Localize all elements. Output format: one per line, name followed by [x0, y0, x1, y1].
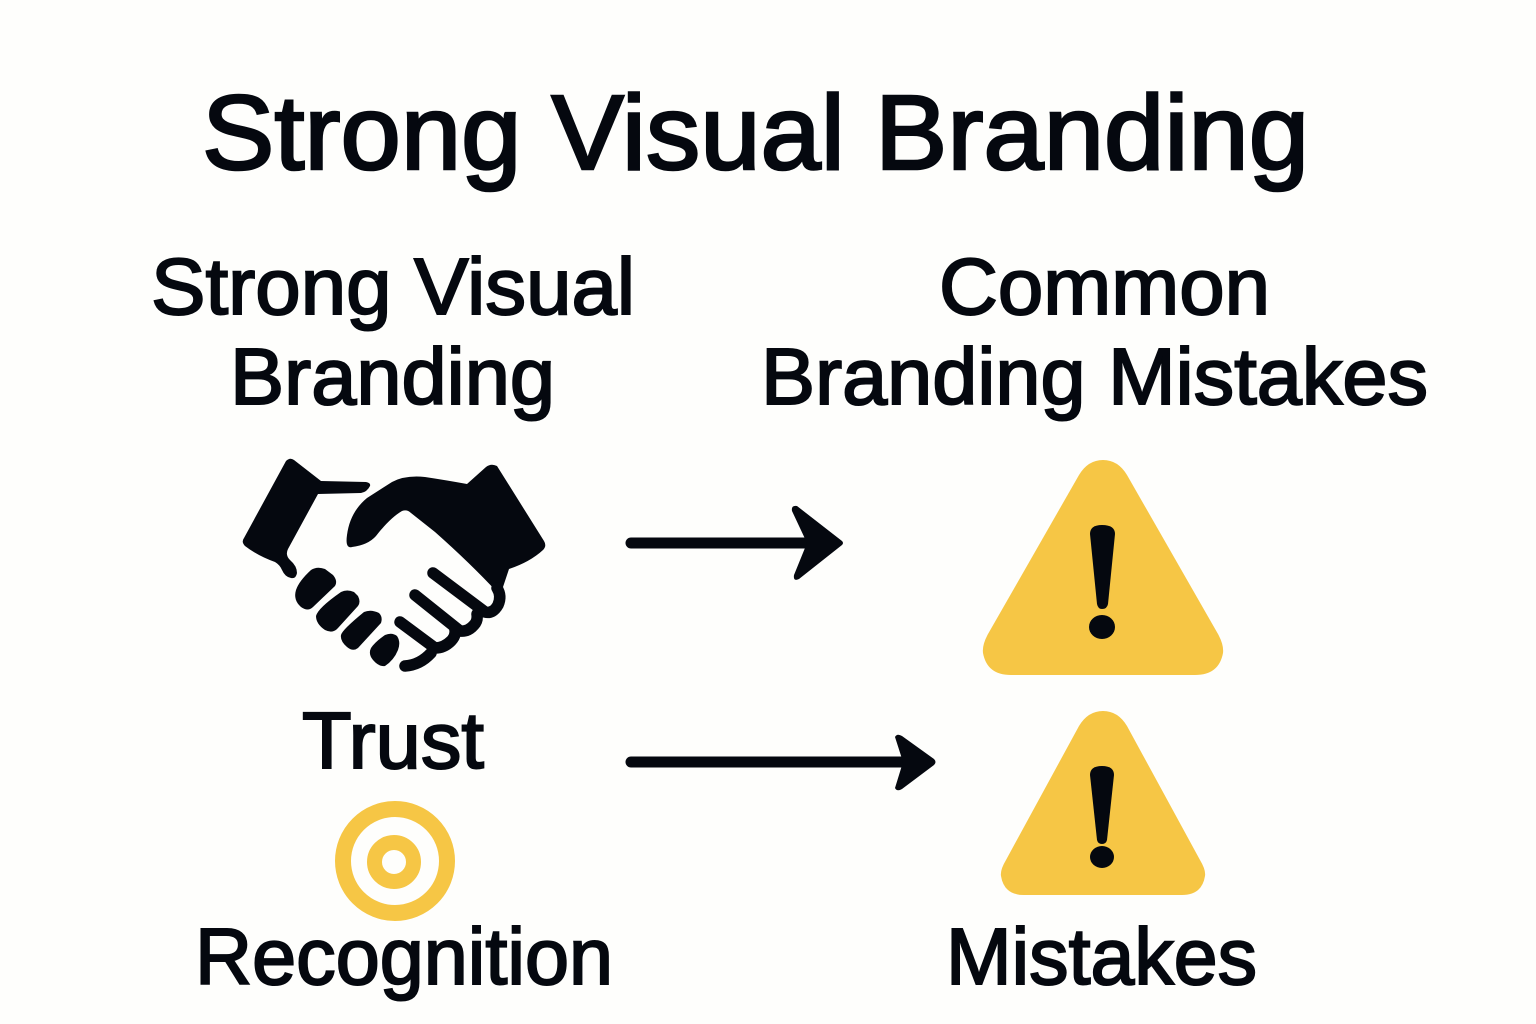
fingers left [295, 568, 336, 610]
handshake finger lines [400, 573, 500, 666]
icon: handshake [243, 459, 545, 666]
icon: warning triangle small [1001, 711, 1205, 895]
heading: strong visual branding: Branding [230, 332, 555, 421]
left cuff and thumb [243, 459, 370, 578]
title: Strong Visual Branding [202, 74, 1309, 192]
arrow: bottom [631, 735, 936, 790]
label: trust: Trust [302, 696, 484, 785]
label: mistakes: Mistakes [946, 912, 1257, 1001]
heading: common branding mistakes [761, 242, 1428, 421]
heading: strong visual branding: Strong Visual [151, 242, 635, 331]
heading: common branding mistakes: Common [939, 242, 1270, 331]
arrow: top [631, 506, 843, 580]
icon: warning triangle large [983, 460, 1223, 675]
right cuff and hand [347, 465, 545, 592]
heading: common branding mistakes: Branding Mistakes [761, 332, 1428, 421]
icon: target [343, 809, 447, 913]
heading: strong visual branding [151, 242, 635, 421]
label: recognition: Recognition [195, 912, 613, 1001]
